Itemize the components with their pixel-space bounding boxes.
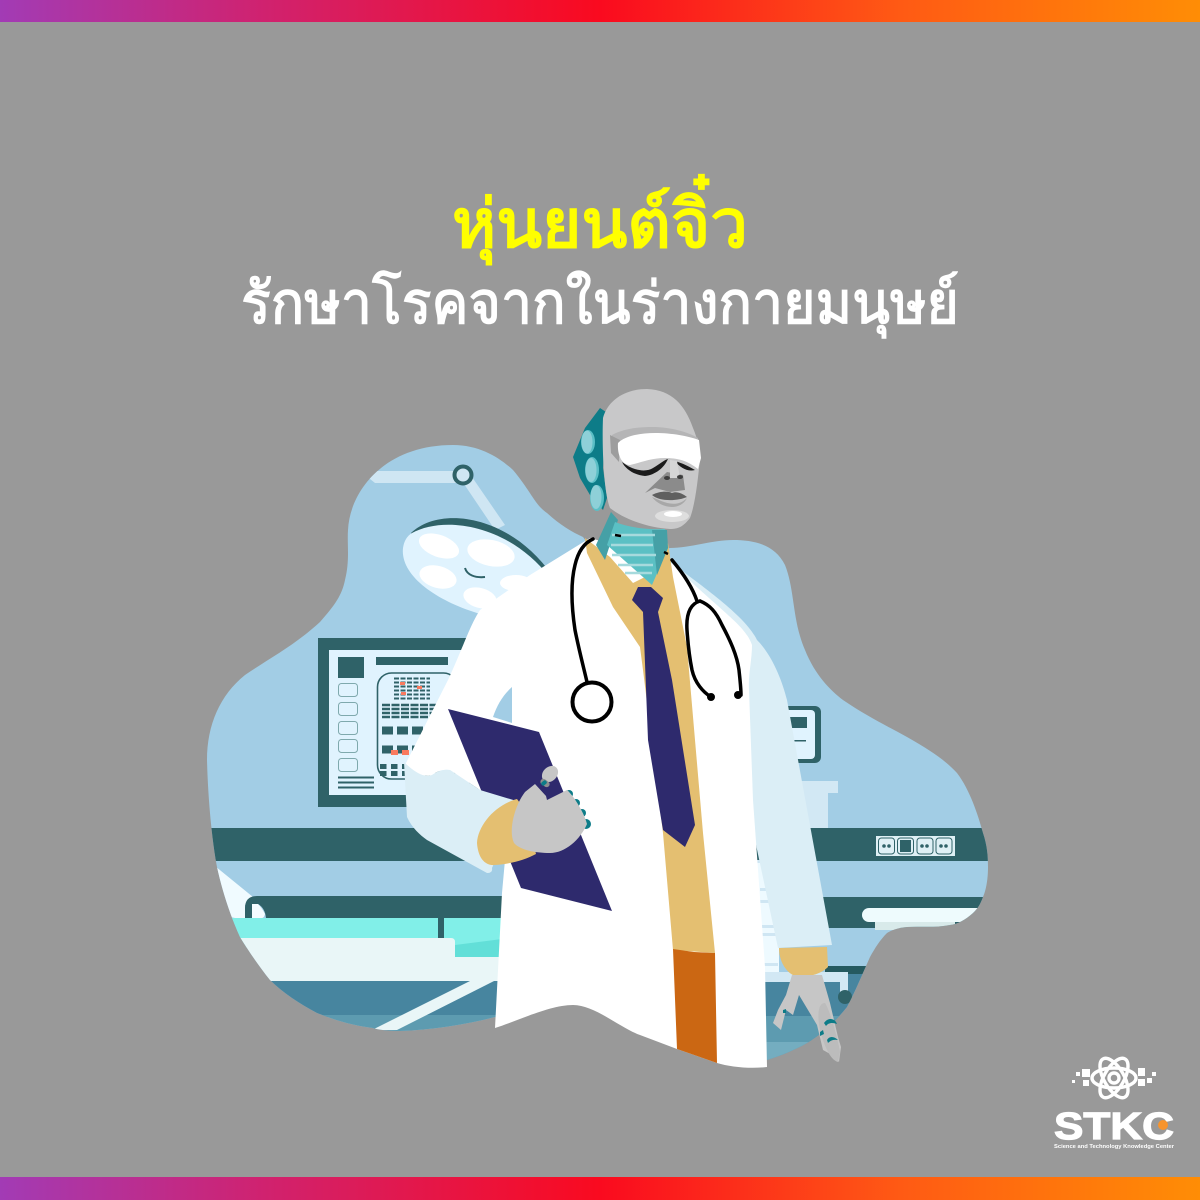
tie (632, 587, 695, 847)
logo dot (1158, 1120, 1168, 1130)
left cuff (477, 799, 536, 865)
clipboard (448, 709, 612, 911)
right wall display (788, 706, 821, 763)
upper wall band (200, 828, 1000, 861)
socket strip (876, 836, 955, 856)
robot head back panel (573, 408, 607, 511)
coat gap (493, 687, 512, 723)
STKC logo (1054, 1054, 1174, 1150)
bed base (271, 981, 498, 1031)
bed headboard (245, 896, 502, 918)
trousers (673, 949, 717, 1063)
hospital room scene (200, 440, 1000, 1070)
stethoscope (572, 539, 741, 722)
robot doctor (404, 389, 841, 1068)
left sleeve (404, 762, 520, 873)
eyelids (622, 459, 695, 476)
wall tray (862, 908, 987, 930)
lamp arm (360, 466, 505, 530)
title: หุ่นยนต์จิ๋ว (452, 174, 748, 266)
right hand (773, 975, 841, 1062)
lab coat (405, 538, 767, 1068)
robot head (603, 389, 700, 529)
cabinet (755, 781, 838, 973)
nose (645, 460, 685, 493)
mouth (652, 492, 687, 507)
logo wordmark: STKC (1054, 1106, 1174, 1148)
robot neck (596, 512, 668, 585)
right cuff (779, 947, 828, 977)
subtitle: รักษาโรคจากในร่างกายมนุษย์ (241, 270, 959, 339)
brow shade (612, 427, 698, 444)
lower right equipment (765, 966, 866, 1060)
shirt (585, 538, 715, 953)
left hand (512, 763, 591, 853)
right sleeve (668, 560, 832, 948)
goggles (618, 433, 701, 469)
logo tagline: Science and Technology Knowledge Center (1054, 1144, 1174, 1150)
surgical lamp (403, 518, 552, 614)
white wedge by the bed (217, 868, 252, 918)
chin highlight (655, 510, 689, 522)
logo pixel squares (1072, 1068, 1156, 1086)
wall monitor (318, 638, 478, 807)
top gradient bar (0, 0, 1200, 22)
goggle strap (610, 435, 620, 462)
bottom gradient bar (0, 1177, 1200, 1200)
right wall band (820, 897, 990, 928)
mattress (232, 918, 501, 981)
logo atom icon (1092, 1054, 1136, 1102)
